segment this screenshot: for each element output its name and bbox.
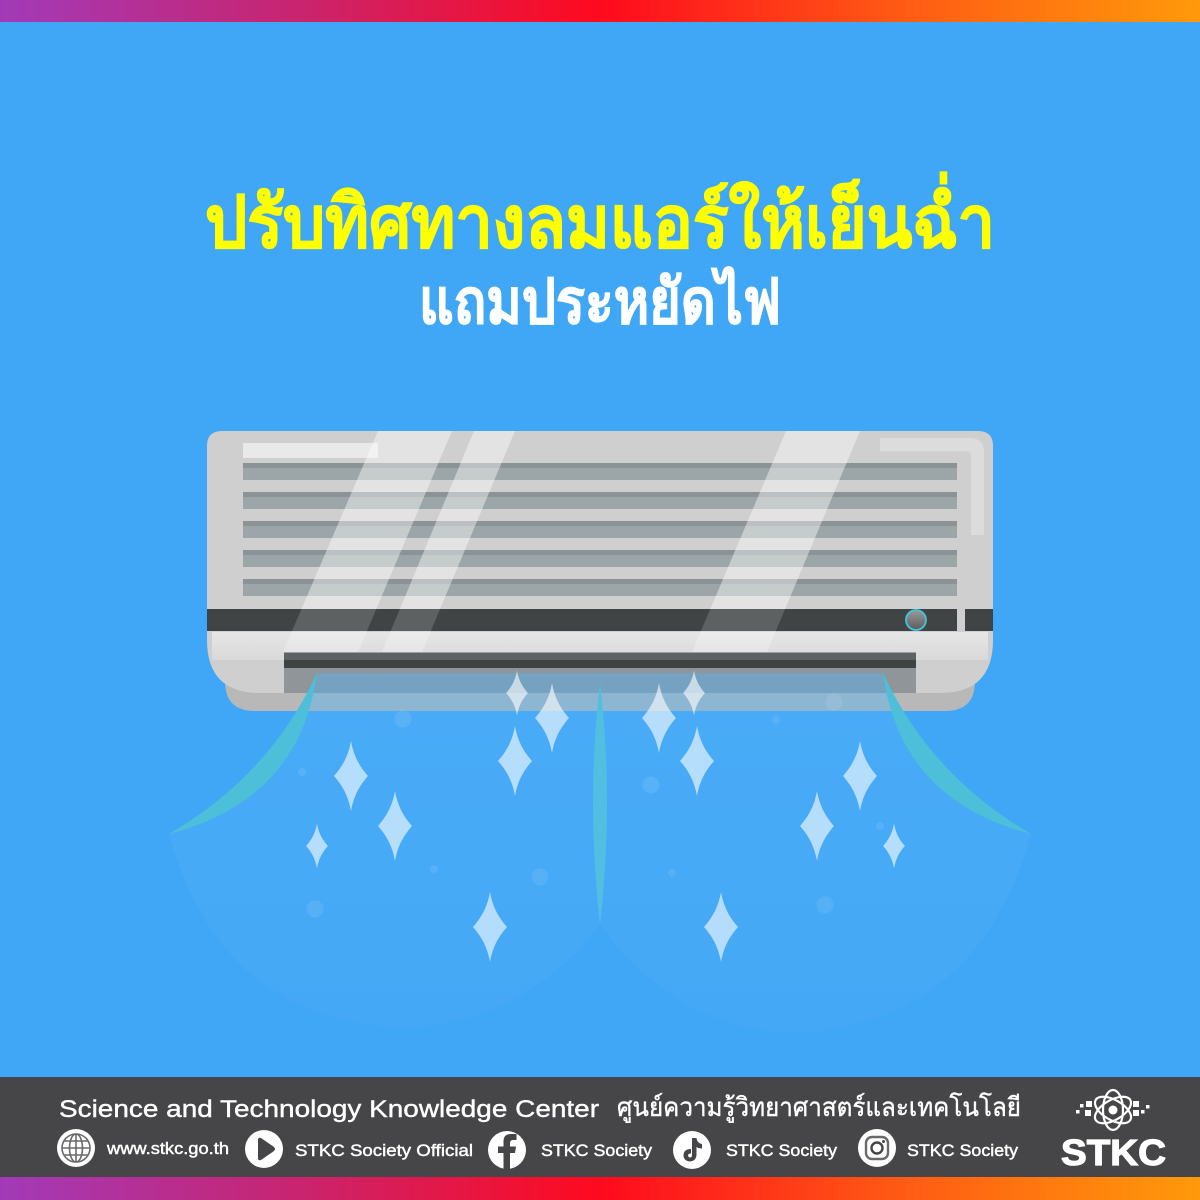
footer background <box>0 1077 1200 1177</box>
facebook label: STKC Society <box>541 1141 653 1160</box>
footer heading english: Science and Technology Knowledge Center <box>59 1096 599 1123</box>
instagram label: STKC Society <box>907 1141 1019 1160</box>
youtube label: STKC Society Official <box>295 1141 473 1160</box>
icon: instagram <box>858 1129 896 1167</box>
tiktok label: STKC Society <box>726 1141 838 1160</box>
top-right corner highlight <box>880 438 984 535</box>
footer heading thai: ศูนย์ความรู้วิทยาศาสตร์และเทคโนโลยี <box>617 1092 1021 1123</box>
cold air flow <box>169 671 1031 1033</box>
left air fan <box>169 673 600 1027</box>
under shadow <box>225 660 975 711</box>
power button <box>906 610 926 630</box>
air conditioner unit <box>207 431 993 711</box>
bubbles <box>298 694 884 918</box>
lower front panel <box>212 632 988 660</box>
sparkles <box>306 671 905 962</box>
icon: tiktok <box>673 1131 711 1169</box>
bottom gradient bar <box>0 1177 1200 1200</box>
logo: STKC <box>1061 1090 1166 1173</box>
icon: youtube play <box>245 1130 283 1168</box>
main body <box>207 431 993 693</box>
right air fan <box>600 673 1031 1033</box>
top-left label highlight <box>243 443 378 458</box>
center air blade <box>593 683 607 925</box>
top gradient bar <box>0 0 1200 22</box>
icon: facebook <box>488 1131 526 1169</box>
icon: globe <box>57 1129 95 1167</box>
left air blade <box>169 673 317 834</box>
glass reflections <box>283 431 860 652</box>
right air blade <box>883 673 1031 834</box>
logo wordmark: STKC <box>1061 1132 1166 1173</box>
air outlet <box>284 652 916 693</box>
footer panel <box>0 1077 1200 1177</box>
website label: www.stkc.go.th <box>106 1140 229 1158</box>
logo atom mark <box>1076 1090 1150 1130</box>
title line 2: แถมประหยัดไฟ <box>419 266 781 337</box>
title line 1: ปรับทิศทางลมแอร์ให้เย็นฉ่ำ <box>205 171 995 263</box>
dark display band <box>207 609 993 631</box>
vent slats <box>243 463 957 596</box>
title <box>205 171 995 337</box>
